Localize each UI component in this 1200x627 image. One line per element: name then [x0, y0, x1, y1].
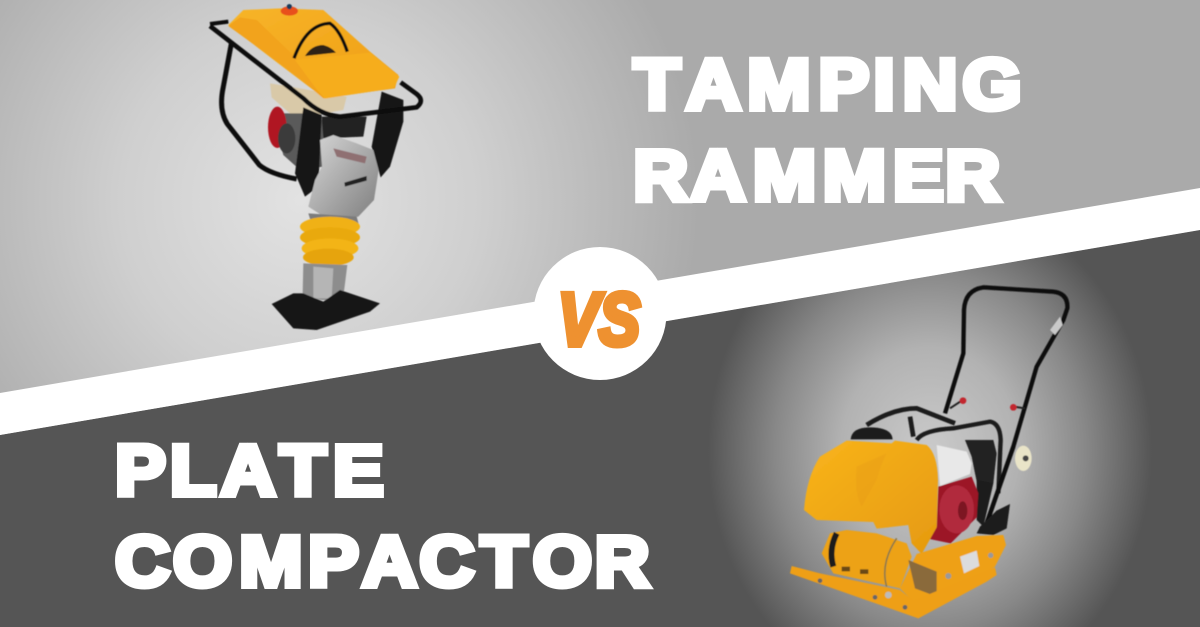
- panel: top light grey background: [0, 0, 1200, 400]
- icon: tamping rammer machine: [210, 4, 421, 330]
- panel: bottom dark grey background: [0, 230, 1200, 627]
- heading line: TAMPING: TAMPING: [634, 44, 1022, 124]
- diagonal white band: [0, 188, 1200, 435]
- heading line: RAMMER: RAMMER: [633, 135, 1000, 215]
- heading: tamping rammer: [633, 44, 1022, 215]
- heading line: COMPACTOR: COMPACTOR: [115, 521, 650, 601]
- icon: plate compactor machine: [790, 287, 1067, 618]
- heading line: PLATE: PLATE: [115, 430, 384, 510]
- vs badge: [534, 247, 666, 380]
- vs label: VS: [558, 278, 640, 361]
- heading: plate compactor: [115, 430, 650, 601]
